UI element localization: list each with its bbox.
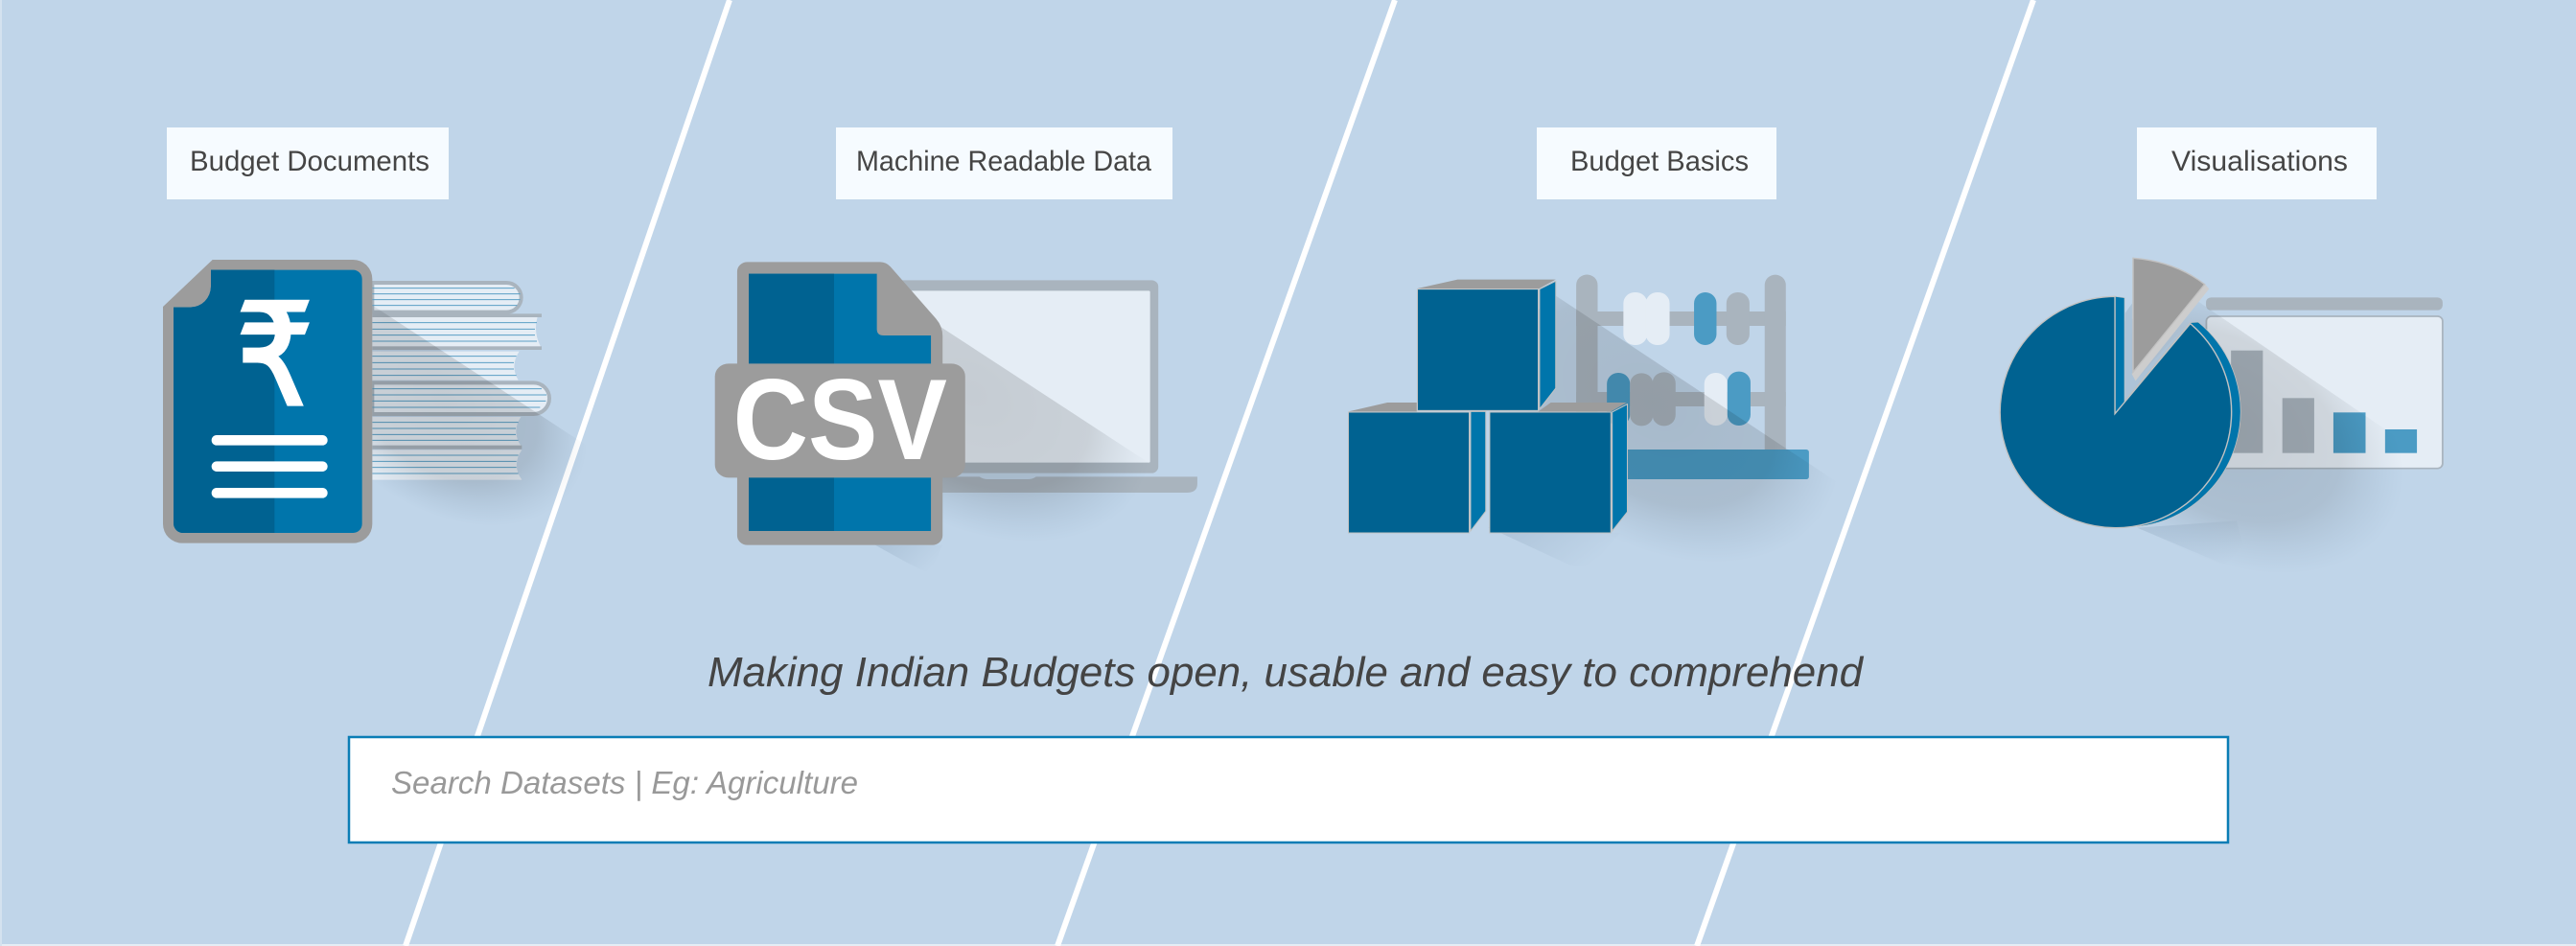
label: Visualisations: Visualisations	[2171, 146, 2348, 177]
shadow tail	[1488, 527, 1620, 567]
label: Budget Basics: Budget Basics	[1570, 146, 1749, 177]
icon: CSV document: CSV	[733, 356, 947, 484]
icon: document: ₹	[237, 274, 313, 438]
search box	[349, 737, 2228, 842]
label: Machine Readable Data	[836, 127, 1172, 199]
icon: stack of books	[372, 283, 549, 480]
shadow tail	[2137, 520, 2250, 570]
icon: CSV document	[715, 262, 965, 545]
icon: document	[163, 260, 372, 543]
icon: building blocks with abacus	[1349, 274, 1901, 664]
label: Budget Documents	[167, 127, 449, 199]
icon: abacus	[1576, 274, 1809, 479]
icon: pie chart	[2000, 258, 2240, 528]
shadow tail	[875, 545, 942, 573]
label: Visualisations	[2137, 127, 2377, 199]
label: Budget Basics	[1537, 127, 1776, 199]
icon: bar chart panel	[2206, 297, 2443, 469]
icon: CSV file with laptop	[715, 262, 1238, 649]
icon: blocks	[1349, 280, 1627, 533]
tagline: Making Indian Budgets open, usable and easy to comprehend	[708, 649, 1865, 696]
label: Budget Documents: Budget Documents	[190, 146, 429, 177]
search box: Search Datasets | Eg: Agriculture	[391, 765, 858, 800]
icon: budget document with books	[163, 260, 604, 585]
icon: pie chart with bar chart	[2000, 258, 2503, 649]
label: Machine Readable Data: Machine Readable Data	[856, 146, 1151, 177]
icon: laptop	[882, 280, 1197, 493]
